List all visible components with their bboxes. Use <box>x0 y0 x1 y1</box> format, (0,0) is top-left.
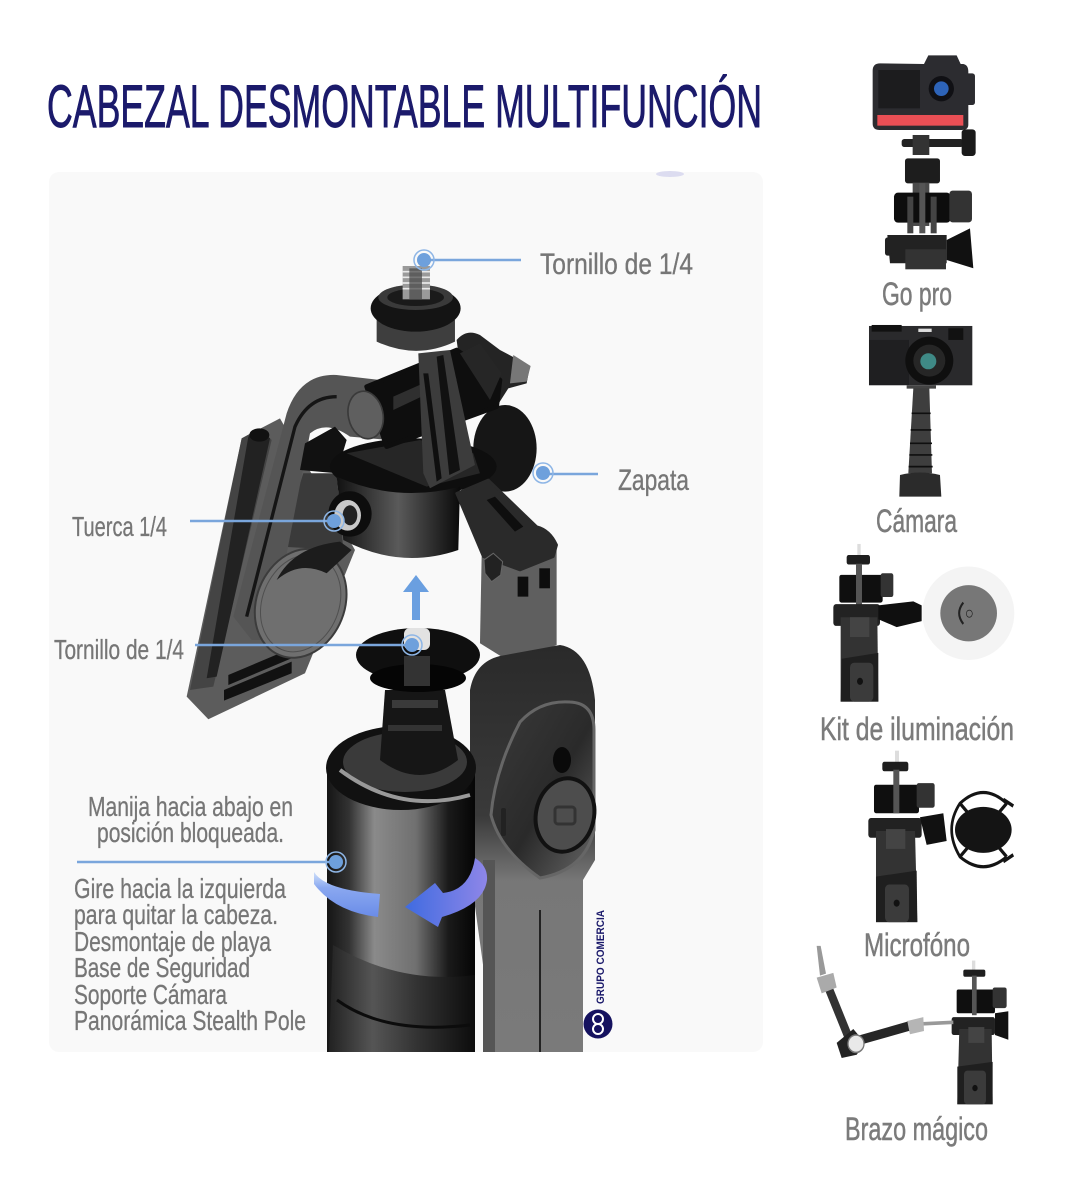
text block: instructions: Panorámica Stealth Pole <box>74 1005 306 1036</box>
text block: instructions <box>74 873 306 1036</box>
collar <box>337 477 460 558</box>
gopro fingers <box>418 350 475 488</box>
arrow: lift up <box>403 575 429 620</box>
callout: shoe: Zapata <box>618 464 689 497</box>
arm <box>233 375 388 640</box>
image: cylinder base and stud <box>326 628 480 1052</box>
neck <box>380 690 458 775</box>
callout: nut <box>72 511 344 542</box>
logo: Grupo Comercia <box>584 910 612 1038</box>
thumbnail: camera on handle <box>869 325 972 497</box>
top screw <box>403 266 430 299</box>
text block: instructions: Gire hacia la izquierda <box>74 873 286 904</box>
collar top <box>330 438 497 495</box>
hex bolt <box>484 553 503 582</box>
arrow: curved turn left <box>405 858 487 927</box>
grip disc <box>239 535 362 672</box>
text block: instructions: Base de Seguridad <box>74 952 250 983</box>
label: Go pro: Go pro <box>882 276 952 312</box>
callout: lower screw <box>54 634 422 665</box>
handle body <box>470 645 595 1052</box>
thumbnail: microphone <box>868 751 1013 922</box>
logo: Grupo Comercia: GRUPO COMERCIA <box>595 910 607 1004</box>
cylinder <box>327 770 475 1052</box>
stud screw <box>404 628 430 650</box>
shoe disc <box>473 405 537 492</box>
callout: handle lock: Manija hacia abajo en <box>88 791 293 822</box>
callout: lower screw: Tornillo de 1/4 <box>54 634 184 665</box>
remote panel <box>491 702 594 878</box>
cylinder rim <box>326 726 476 810</box>
power switch <box>553 747 571 773</box>
callout: handle lock: posición bloqueada. <box>97 817 284 848</box>
label: Kit de iluminación: Kit de iluminación <box>820 711 1014 747</box>
thumbnail: action camera on head <box>873 55 976 269</box>
top knob <box>377 320 455 351</box>
callout: top screw: Tornillo de 1/4 <box>540 248 693 281</box>
callout: nut: Tuerca 1/4 <box>72 511 167 542</box>
arrow: curved band left <box>314 872 380 917</box>
callout: top screw <box>414 248 693 281</box>
panel: main product background <box>49 172 763 1052</box>
stud plate <box>356 628 480 682</box>
label: Brazo mágico: Brazo mágico <box>845 1111 988 1147</box>
horizontal pivot <box>367 350 500 447</box>
image: handle with remote <box>470 645 601 1052</box>
threaded nut 1/4 <box>328 491 372 537</box>
rear right knob <box>457 333 530 417</box>
callout: shoe <box>533 463 689 497</box>
thumbnail: magic arm <box>817 946 1008 1104</box>
lower section <box>329 945 475 1052</box>
label: Cámara: Cámara <box>876 503 957 539</box>
shutter button <box>529 773 601 857</box>
lower hinge arm <box>480 527 557 664</box>
text block: instructions: Desmontaje de playa <box>74 926 271 957</box>
label: Microfóno: Microfóno <box>864 927 970 963</box>
left plate <box>187 418 355 719</box>
image: detachable head <box>187 266 557 719</box>
thumbnail: ring light kit <box>833 544 1014 702</box>
text block: instructions: para quitar la cabeza. <box>74 899 278 930</box>
callout: handle lock <box>77 791 346 872</box>
text block: instructions: Soporte Cámara <box>74 979 227 1010</box>
